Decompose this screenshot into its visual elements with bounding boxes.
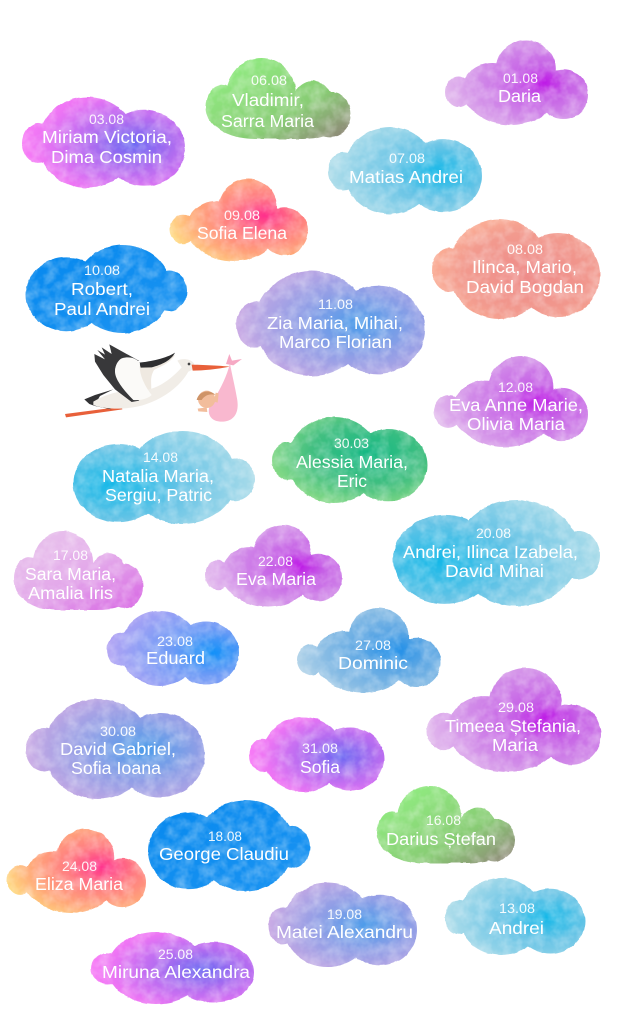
cloud: 22.08 Eva Maria: Eva Maria [236, 569, 316, 589]
cloud: 03.08 Miriam Victoria, Dima Cosmin: Miriam Victoria, [42, 127, 172, 147]
cloud: 07.08 Matias Andrei: 07.08 [389, 151, 425, 166]
cloud: 18.08 George Claudiu: 18.08 [208, 829, 242, 844]
cloud: 30.03 Alessia Maria, Eric [272, 417, 427, 503]
cloud: 27.08 Dominic [297, 608, 441, 693]
cloud: 20.08 Andrei, Ilinca Izabela, David Mihai [393, 500, 600, 606]
cloud: 06.08 Vladimir, Sarra Maria: Vladimir, [232, 90, 304, 110]
cloud: 20.08 Andrei, Ilinca Izabela, David Mihai: David Mihai [445, 561, 544, 581]
cloud: 10.08 Robert, Paul Andrei: Robert, [71, 279, 133, 299]
cloud: 16.08 Darius Ștefan [377, 786, 515, 863]
cloud: 13.08 Andrei [445, 878, 585, 955]
cloud: 08.08 Ilinca, Mario, David Bogdan: David Bogdan [466, 277, 584, 297]
cloud: 01.08 Daria: Daria [498, 86, 541, 106]
cloud: 14.08 Natalia Maria, Sergiu, Patric: Sergiu, Patric [105, 485, 212, 505]
cloud: 19.08 Matei Alexandru: 19.08 [327, 907, 362, 922]
cloud: 01.08 Daria: 01.08 [503, 71, 538, 86]
cloud: 24.08 Eliza Maria: 24.08 [62, 859, 97, 874]
cloud: 25.08 Miruna Alexandra: Miruna Alexandra [102, 962, 250, 982]
cloud: 06.08 Vladimir, Sarra Maria [206, 58, 351, 139]
cloud: 25.08 Miruna Alexandra: 25.08 [158, 947, 193, 962]
cloud: 19.08 Matei Alexandru: Matei Alexandru [276, 922, 413, 942]
cloud: 14.08 Natalia Maria, Sergiu, Patric: Natalia Maria, [102, 466, 214, 486]
cloud: 24.08 Eliza Maria: Eliza Maria [35, 874, 123, 894]
cloud: 13.08 Andrei: Andrei [489, 918, 544, 938]
cloud: 03.08 Miriam Victoria, Dima Cosmin: Dima Cosmin [51, 147, 162, 167]
cloud: 25.08 Miruna Alexandra [91, 932, 254, 1004]
cloud: 03.08 Miriam Victoria, Dima Cosmin [22, 97, 185, 188]
cloud: 23.08 Eduard: Eduard [146, 648, 205, 668]
cloud: 12.08 Eva Anne Marie, Olivia Maria: Olivia Maria [467, 414, 565, 434]
illustration: stork carrying baby bundle [65, 344, 242, 422]
cloud: 10.08 Robert, Paul Andrei [26, 245, 187, 333]
cloud: 06.08 Vladimir, Sarra Maria: 06.08 [251, 73, 287, 88]
cloud: 23.08 Eduard: 23.08 [157, 634, 193, 649]
cloud: 08.08 Ilinca, Mario, David Bogdan: Ilinca, Mario, [472, 257, 577, 277]
cloud: 03.08 Miriam Victoria, Dima Cosmin: 03.08 [89, 112, 124, 127]
cloud: 23.08 Eduard [107, 611, 239, 686]
cloud: 29.08 Timeea Ștefania, Maria: Timeea Ștefania, [445, 716, 581, 736]
cloud: 11.08 Zia Maria, Mihai, Marco Florian: Marco Florian [279, 332, 392, 352]
cloud: 20.08 Andrei, Ilinca Izabela, David Mihai: Andrei, Ilinca Izabela, [403, 542, 578, 562]
cloud: 07.08 Matias Andrei: Matias Andrei [349, 167, 463, 187]
cloud: 17.08 Sara Maria, Amalia Iris [14, 531, 143, 610]
cloud: 20.08 Andrei, Ilinca Izabela, David Mihai: 20.08 [476, 526, 511, 541]
cloud: 01.08 Daria [445, 40, 588, 125]
cloud: 11.08 Zia Maria, Mihai, Marco Florian: Zia Maria, Mihai, [267, 313, 403, 333]
cloud: 30.08 David Gabriel, Sofia Ioana [26, 699, 205, 799]
cloud: 14.08 Natalia Maria, Sergiu, Patric [73, 431, 255, 524]
cloud: 27.08 Dominic: 27.08 [355, 638, 391, 653]
cloud: 12.08 Eva Anne Marie, Olivia Maria: 12.08 [498, 380, 533, 395]
cloud: 16.08 Darius Ștefan: Darius Ștefan [386, 829, 496, 849]
cloud: 30.08 David Gabriel, Sofia Ioana: Sofia Ioana [71, 758, 161, 778]
cloud: 29.08 Timeea Ștefania, Maria [427, 668, 601, 772]
cloud: 17.08 Sara Maria, Amalia Iris: 17.08 [53, 548, 88, 563]
cloud: 24.08 Eliza Maria [7, 829, 146, 913]
cloud: 16.08 Darius Ștefan: 16.08 [426, 813, 461, 828]
cloud: 18.08 George Claudiu: George Claudiu [159, 844, 289, 864]
cloud: 11.08 Zia Maria, Mihai, Marco Florian [236, 271, 425, 376]
cloud: 30.03 Alessia Maria, Eric: Alessia Maria, [296, 452, 408, 472]
cloud: 09.08 Sofia Elena [170, 179, 308, 261]
cloud: 29.08 Timeea Ștefania, Maria: 29.08 [498, 700, 534, 715]
cloud: 09.08 Sofia Elena: Sofia Elena [197, 223, 287, 243]
cloud: 22.08 Eva Maria: 22.08 [258, 554, 293, 569]
cloud: 08.08 Ilinca, Mario, David Bogdan [432, 219, 600, 319]
cloud: 18.08 George Claudiu [148, 800, 310, 891]
cloud: 17.08 Sara Maria, Amalia Iris: Sara Maria, [25, 564, 116, 584]
cloud: 13.08 Andrei: 13.08 [499, 901, 535, 916]
cloud: 17.08 Sara Maria, Amalia Iris: Amalia Iris [28, 583, 113, 603]
cloud: 10.08 Robert, Paul Andrei: Paul Andrei [54, 299, 150, 319]
cloud: 30.08 David Gabriel, Sofia Ioana: David Gabriel, [60, 739, 176, 759]
cloud: 30.03 Alessia Maria, Eric: 30.03 [334, 436, 369, 451]
cloud: 07.08 Matias Andrei [328, 127, 482, 214]
cloud: 09.08 Sofia Elena: 09.08 [224, 208, 260, 223]
cloud: 12.08 Eva Anne Marie, Olivia Maria [434, 356, 588, 447]
cloud: 22.08 Eva Maria [205, 525, 342, 607]
cloud: 11.08 Zia Maria, Mihai, Marco Florian: 11.08 [318, 297, 353, 312]
cloud: 06.08 Vladimir, Sarra Maria: Sarra Maria [221, 111, 314, 131]
cloud: 19.08 Matei Alexandru [268, 883, 417, 967]
cloud: 29.08 Timeea Ștefania, Maria: Maria [492, 735, 538, 755]
cloud: 30.08 David Gabriel, Sofia Ioana: 30.08 [100, 724, 136, 739]
cloud: 10.08 Robert, Paul Andrei: 10.08 [84, 263, 120, 278]
cloud: 27.08 Dominic: Dominic [338, 653, 408, 673]
cloud: 31.08 Sofia [249, 717, 384, 792]
cloud: 31.08 Sofia: 31.08 [302, 741, 338, 756]
cloud: 31.08 Sofia: Sofia [300, 757, 340, 777]
cloud: 12.08 Eva Anne Marie, Olivia Maria: Eva Anne Marie, [449, 395, 583, 415]
cloud: 08.08 Ilinca, Mario, David Bogdan: 08.08 [507, 242, 543, 257]
cloud: 14.08 Natalia Maria, Sergiu, Patric: 14.08 [143, 450, 178, 465]
cloud: 30.03 Alessia Maria, Eric: Eric [337, 471, 367, 491]
